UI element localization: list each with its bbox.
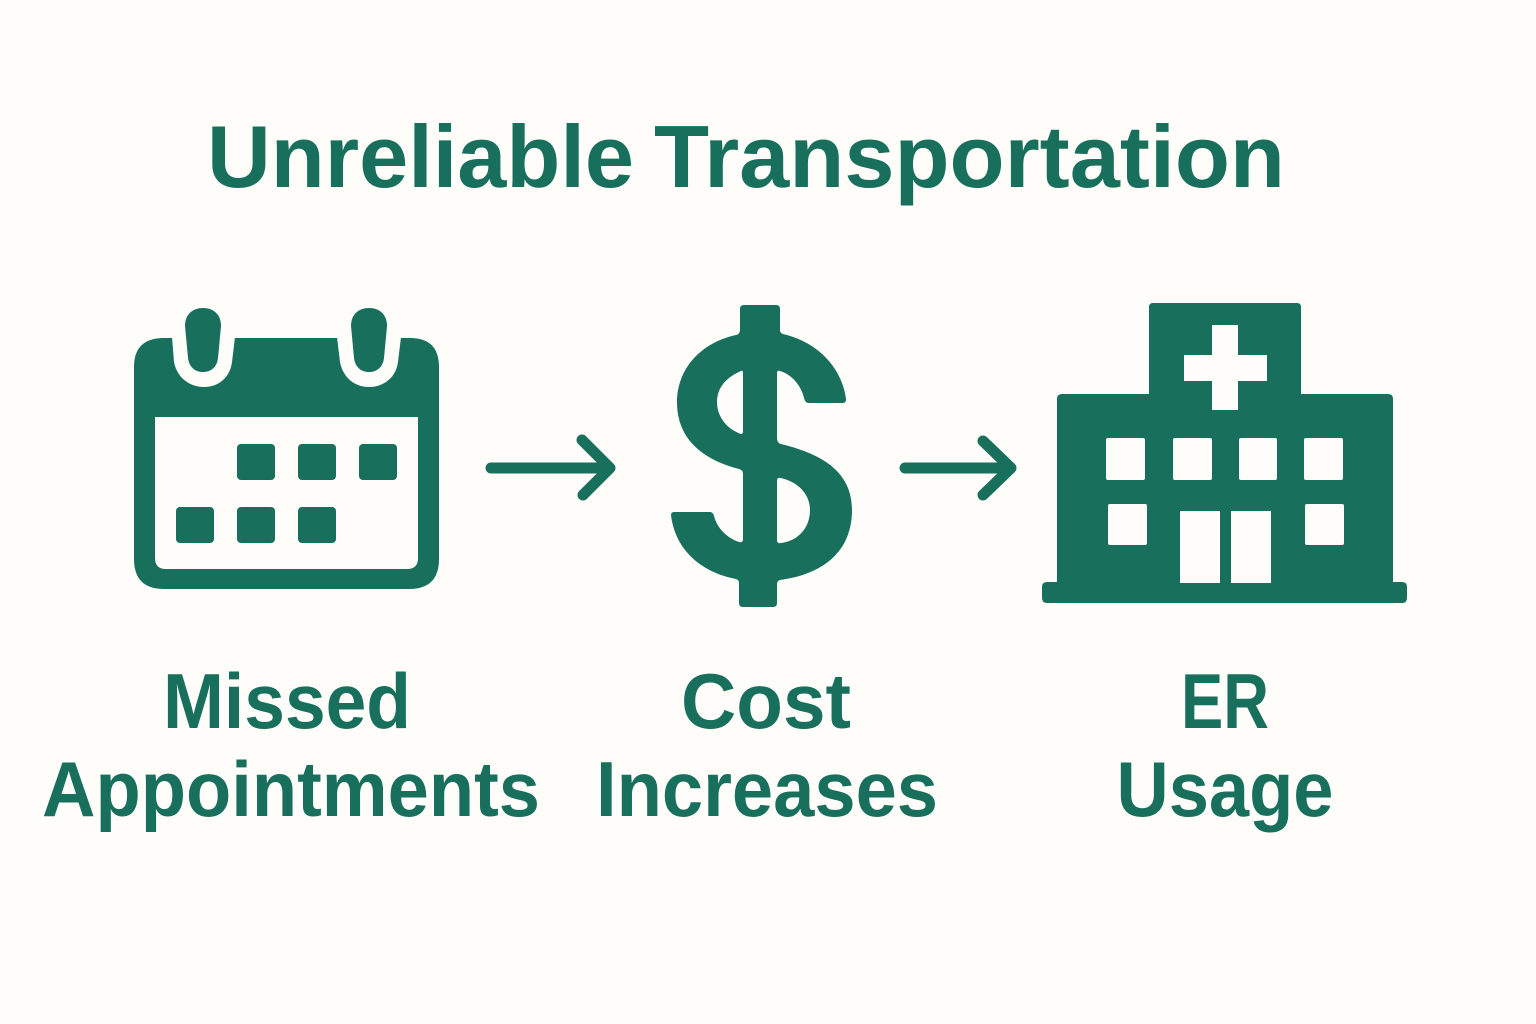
label: cost increases: Cost	[681, 657, 851, 745]
label: er usage: ER	[1181, 657, 1269, 745]
label: missed appointments: Missed	[163, 657, 411, 745]
title: Transportation	[654, 107, 1285, 206]
label: missed appointments	[42, 657, 540, 833]
medical cross	[1184, 325, 1267, 410]
label: er usage	[1116, 657, 1334, 833]
arrow: calendar to dollar	[491, 440, 610, 495]
label: missed appointments: Appointments	[42, 745, 540, 833]
label: cost increases	[596, 657, 938, 833]
icon: dollar sign	[671, 305, 852, 607]
title	[207, 107, 1285, 206]
label: er usage: Usage	[1116, 745, 1334, 833]
title: Unreliable	[207, 107, 634, 206]
icon: hospital	[1042, 303, 1407, 603]
arrow: dollar to hospital	[905, 441, 1011, 495]
label: cost increases: Increases	[596, 745, 938, 833]
icon: calendar	[134, 308, 439, 589]
